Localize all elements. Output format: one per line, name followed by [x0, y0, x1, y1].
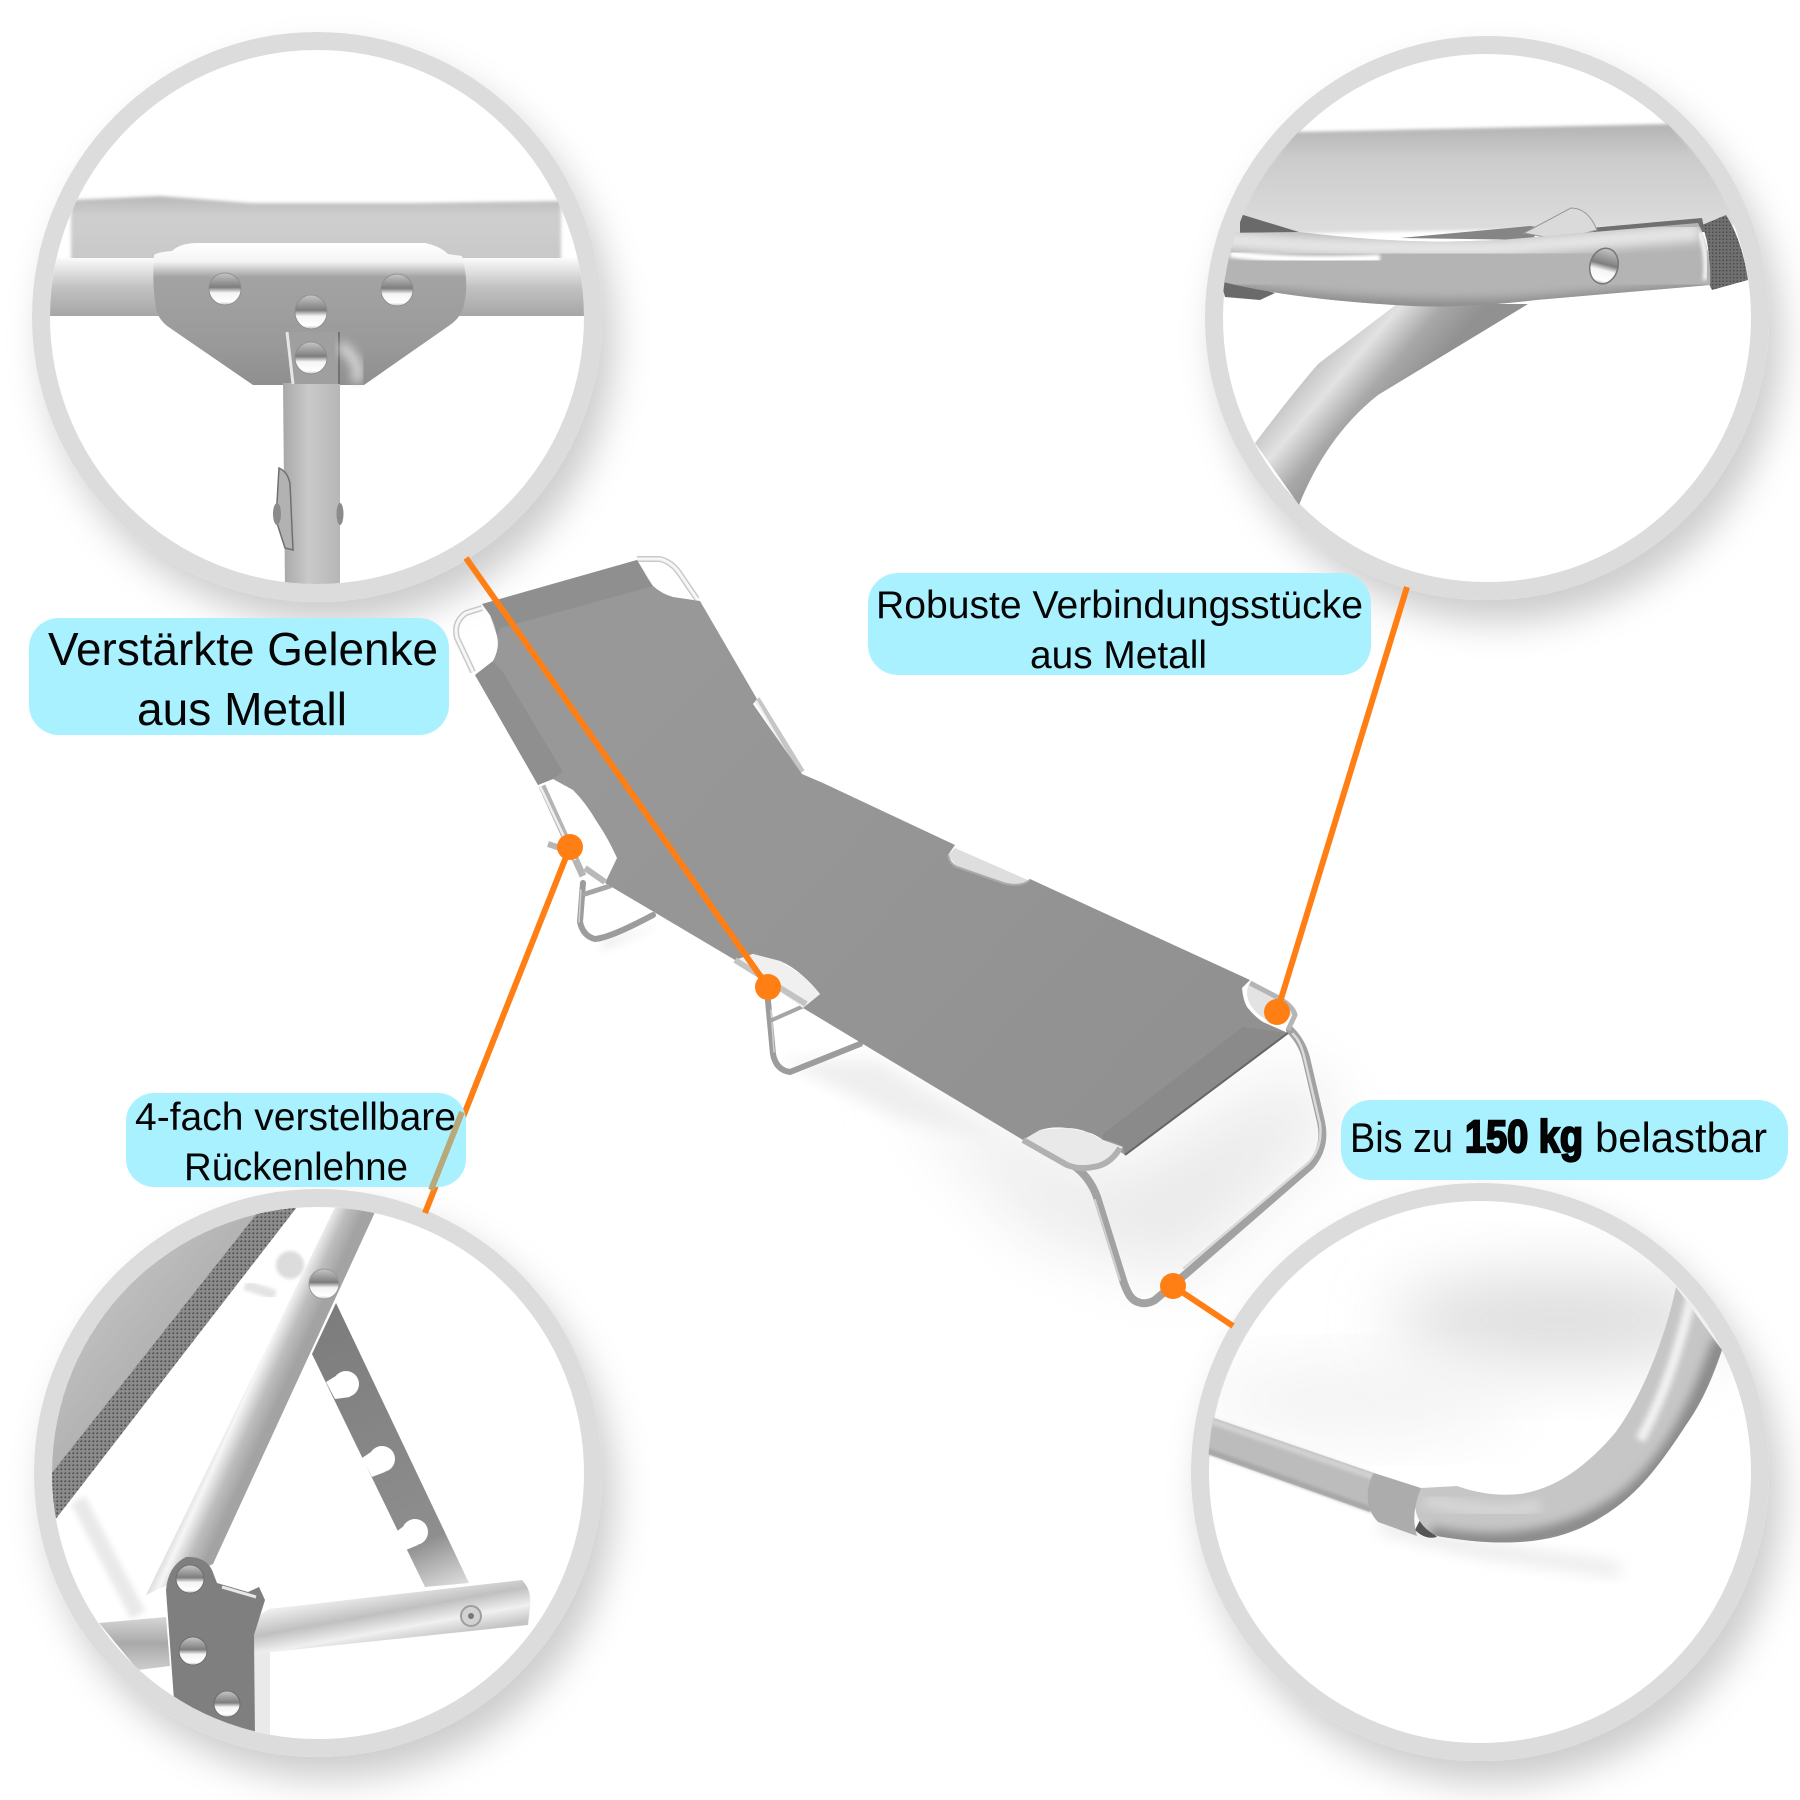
leader line: reinforced joint — [466, 558, 768, 987]
side cutout plates — [735, 954, 820, 1008]
callout: load capacity: belastbar — [1595, 1114, 1767, 1161]
callout: adjustable backrest: 4-fach verstellbare — [135, 1096, 456, 1139]
callout: load capacity — [1341, 1100, 1788, 1180]
horizontal frame tube — [40, 258, 595, 316]
bolt — [461, 1606, 481, 1626]
front legs — [1073, 1030, 1322, 1303]
marker dot: connector — [1264, 999, 1290, 1025]
head frame — [456, 559, 697, 672]
sleeve — [1368, 1473, 1421, 1536]
ground shadow — [1390, 1275, 1730, 1365]
curved frame tube — [1224, 223, 1710, 306]
dark fabric hem — [1240, 215, 1299, 233]
marker dot: load capacity — [1160, 1273, 1186, 1299]
leader line: backrest — [425, 847, 570, 1213]
curved tube — [1400, 1270, 1740, 1560]
callout: adjustable backrest: Rückenlehne — [184, 1146, 408, 1189]
callout: adjustable backrest — [126, 1093, 466, 1190]
fabric band behind joint — [71, 196, 561, 262]
callout: reinforced joints: Verstärkte Gelenke — [48, 623, 438, 675]
bracket — [1524, 208, 1597, 240]
fabric — [475, 560, 1288, 1155]
marker dot: backrest — [557, 834, 583, 860]
horizontal tube — [243, 1580, 530, 1654]
callout: metal connectors: Robuste Verbindungsstücke — [876, 584, 1363, 627]
rivet on tube — [309, 1269, 339, 1299]
rivet — [1588, 248, 1620, 284]
plate rivets — [176, 1565, 240, 1717]
fabric panel — [52, 1208, 294, 1517]
ghost tube — [78, 1500, 138, 1615]
sleeve shadow — [1415, 1520, 1437, 1538]
leader line: connector — [1277, 587, 1407, 1012]
fabric hems — [475, 560, 1288, 1155]
floor shadow — [900, 1070, 1340, 1280]
side clip — [276, 468, 293, 550]
zoom circle: metal connector — [1200, 45, 1760, 591]
zoom circle: reinforced joint — [40, 41, 595, 593]
callout: reinforced joints — [29, 618, 449, 735]
straight tube — [1205, 1415, 1374, 1512]
vertical stem — [283, 383, 340, 590]
leg tube — [1255, 304, 1528, 505]
callout: metal connectors: aus Metall — [1030, 634, 1207, 677]
rear legs — [579, 883, 860, 1072]
callout: reinforced joints: aus Metall — [137, 683, 347, 735]
lounger product — [456, 559, 1340, 1303]
hinge plate — [166, 1557, 265, 1740]
vertical light tube — [254, 1652, 270, 1734]
stem bracket — [292, 354, 340, 384]
left tube stub — [99, 1617, 170, 1670]
callout: load capacity: 150 kg — [1465, 1111, 1583, 1162]
fabric surface — [1215, 124, 1760, 235]
side adjuster — [542, 786, 583, 876]
joint plate — [153, 243, 466, 385]
main backrest tube — [146, 1205, 376, 1595]
slots — [326, 1371, 428, 1550]
rivets — [209, 273, 413, 374]
woven fabric end — [1702, 215, 1748, 290]
leader line: load capacity — [1173, 1286, 1233, 1326]
callout: load capacity: Bis zu — [1350, 1114, 1453, 1161]
zoom circle: adjustable backrest — [30, 1198, 593, 1748]
zoom circle: load-bearing frame — [1200, 1192, 1760, 1752]
slotted bar — [312, 1303, 469, 1587]
woven hem — [48, 1207, 297, 1520]
callout: metal connectors — [868, 573, 1371, 677]
mid top edge bracket — [948, 848, 1030, 885]
marker dot: reinforced joint — [755, 974, 781, 1000]
